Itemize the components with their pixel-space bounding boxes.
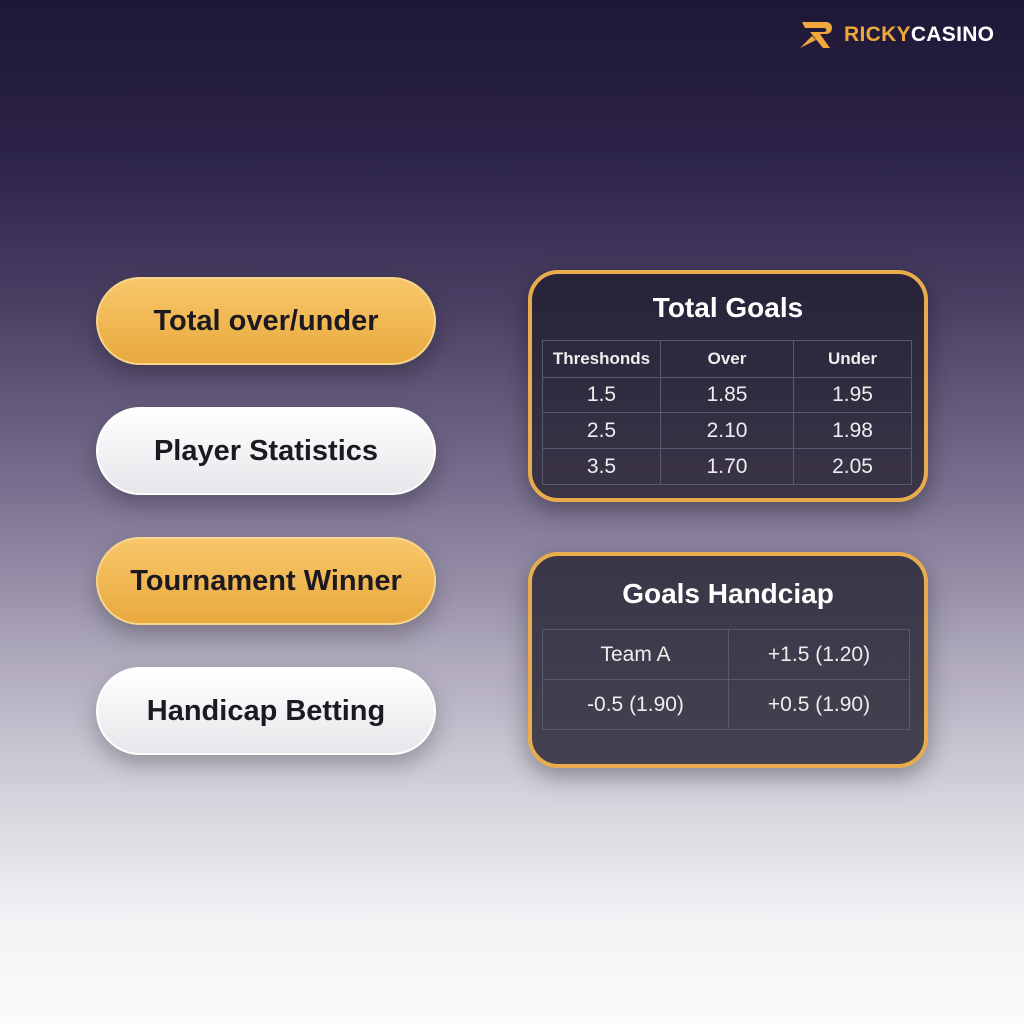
table: total goals odds: 1.70 — [707, 454, 747, 478]
table: total goals odds: 1.5 — [587, 383, 616, 406]
pill: Total over/under — [96, 277, 436, 365]
table: total goals odds: 1.98 — [832, 418, 873, 442]
pill: Handicap Betting: Handicap Betting — [147, 694, 385, 726]
table: handicap odds: +1.5 (1.20) — [768, 642, 870, 666]
table: total goals odds: 2.5 — [587, 418, 616, 442]
logo — [800, 22, 994, 48]
table: total goals odds: Under — [828, 349, 877, 368]
panel: Goals Handicap — [528, 552, 928, 768]
panel: Total Goals — [528, 270, 928, 502]
pill: Handicap Betting — [96, 667, 436, 755]
table: handicap odds: -0.5 (1.90) — [587, 692, 684, 716]
pill: Tournament Winner — [96, 537, 436, 625]
table: total goals odds: 1.85 — [707, 383, 747, 406]
pill: Total over/under: Total over/under — [153, 304, 379, 336]
heading: Goals HandcIap: Goals Handciap — [622, 578, 834, 609]
table: total goals odds: 3.5 — [587, 454, 616, 478]
pill: Player Statistics: Player Statistics — [154, 434, 378, 466]
table: total goals odds: 2.05 — [832, 454, 873, 478]
pill: Tournament Winner: Tournament Winner — [130, 564, 402, 596]
logo: RICKYCASINO — [844, 23, 994, 46]
table: handicap odds: +0.5 (1.90) — [768, 692, 870, 716]
table: handicap odds: Team A — [600, 642, 671, 666]
table: total goals odds: 2.10 — [707, 418, 747, 442]
pill: Player Statistics — [96, 407, 436, 495]
table: total goals odds: Threshonds — [553, 349, 650, 368]
table: total goals odds: 1.95 — [832, 383, 873, 406]
icon: logo R — [800, 22, 832, 48]
heading: Total Goals: Total Goals — [653, 292, 803, 323]
table: total goals odds — [542, 340, 912, 485]
table: total goals odds: Over — [708, 349, 746, 368]
table: handicap odds — [542, 629, 910, 730]
